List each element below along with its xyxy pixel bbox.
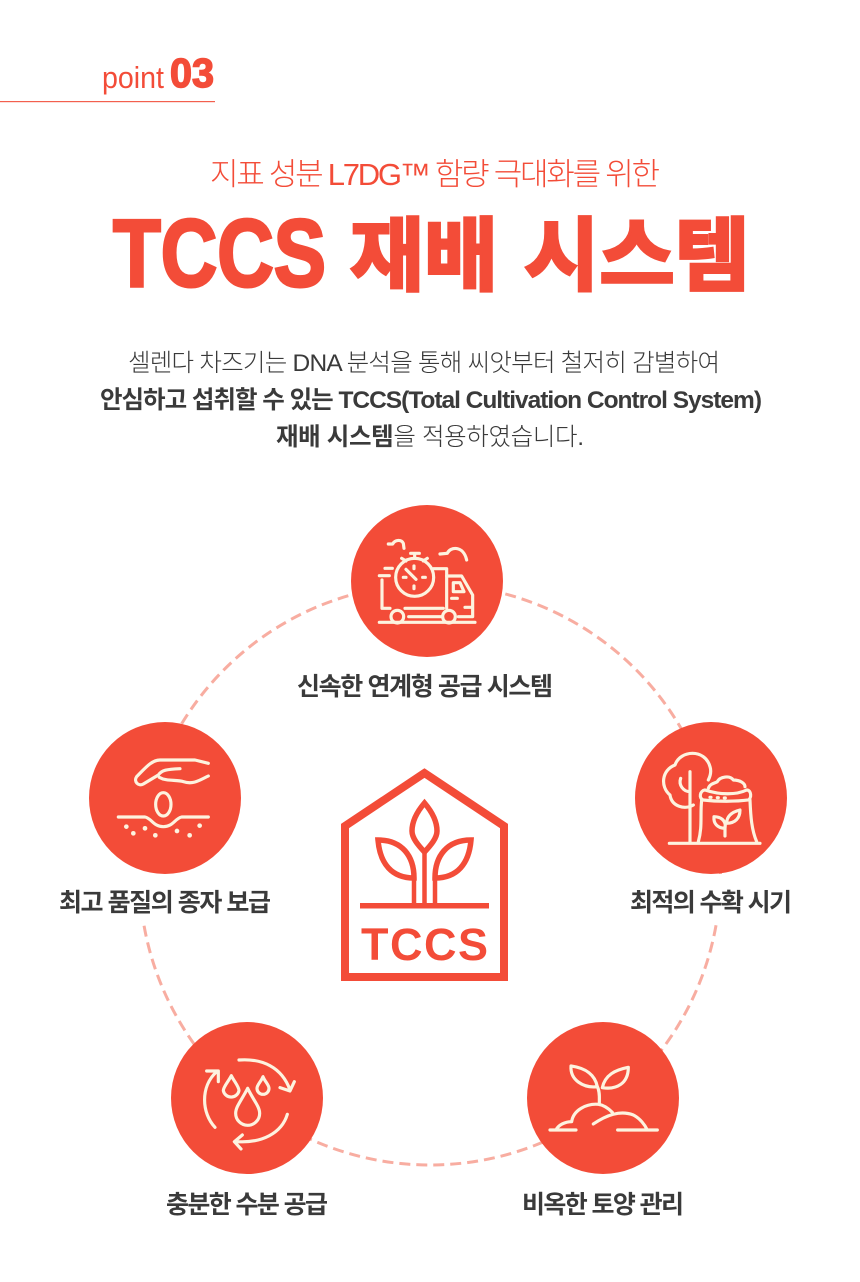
point label [0, 50, 215, 102]
central TCCS logo [345, 773, 504, 977]
icon: tree and bag [664, 753, 760, 843]
central TCCS logo: TCCS [361, 919, 488, 970]
main title: 재배 [350, 212, 498, 301]
label: harvest [622, 874, 800, 920]
node: seed [50, 722, 280, 920]
dashed ring [140, 584, 720, 1165]
main title: 시스템 [524, 212, 750, 301]
label: supply system: 신속한 연계형 공급 시스템 [297, 673, 553, 701]
main title [113, 200, 750, 307]
main title: TCCS [113, 200, 326, 307]
point label: 03 [170, 50, 214, 96]
node: soil [522, 1022, 684, 1219]
subtitle: 지표 성분 L7DG™ 함량 극대화를 위한 [210, 157, 660, 192]
icon: water cycle [205, 1060, 294, 1149]
node: water [166, 1022, 328, 1219]
point label: point [102, 60, 164, 95]
icon: hand and seed [118, 760, 208, 838]
description text: 재배 시스템을 적용하였습니다. [276, 423, 584, 451]
description text [100, 349, 762, 451]
label: harvest: 최적의 수확 시기 [630, 889, 792, 917]
icon: truck with stopwatch [379, 540, 475, 623]
icon: sprout [550, 1066, 657, 1130]
label: seed: 최고 품질의 종자 보급 [59, 889, 271, 917]
node: supply system [290, 505, 560, 702]
label: water: 충분한 수분 공급 [166, 1191, 328, 1219]
description text: 안심하고 섭취할 수 있는 TCCS(Total Cultivation Control System) [100, 386, 762, 414]
node: harvest [622, 722, 800, 920]
description text: 셀렌다 차즈기는 DNA 분석을 통해 씨앗부터 철저히 감별하여 [128, 349, 720, 377]
label: seed [50, 874, 280, 920]
label: soil: 비옥한 토양 관리 [522, 1191, 684, 1219]
